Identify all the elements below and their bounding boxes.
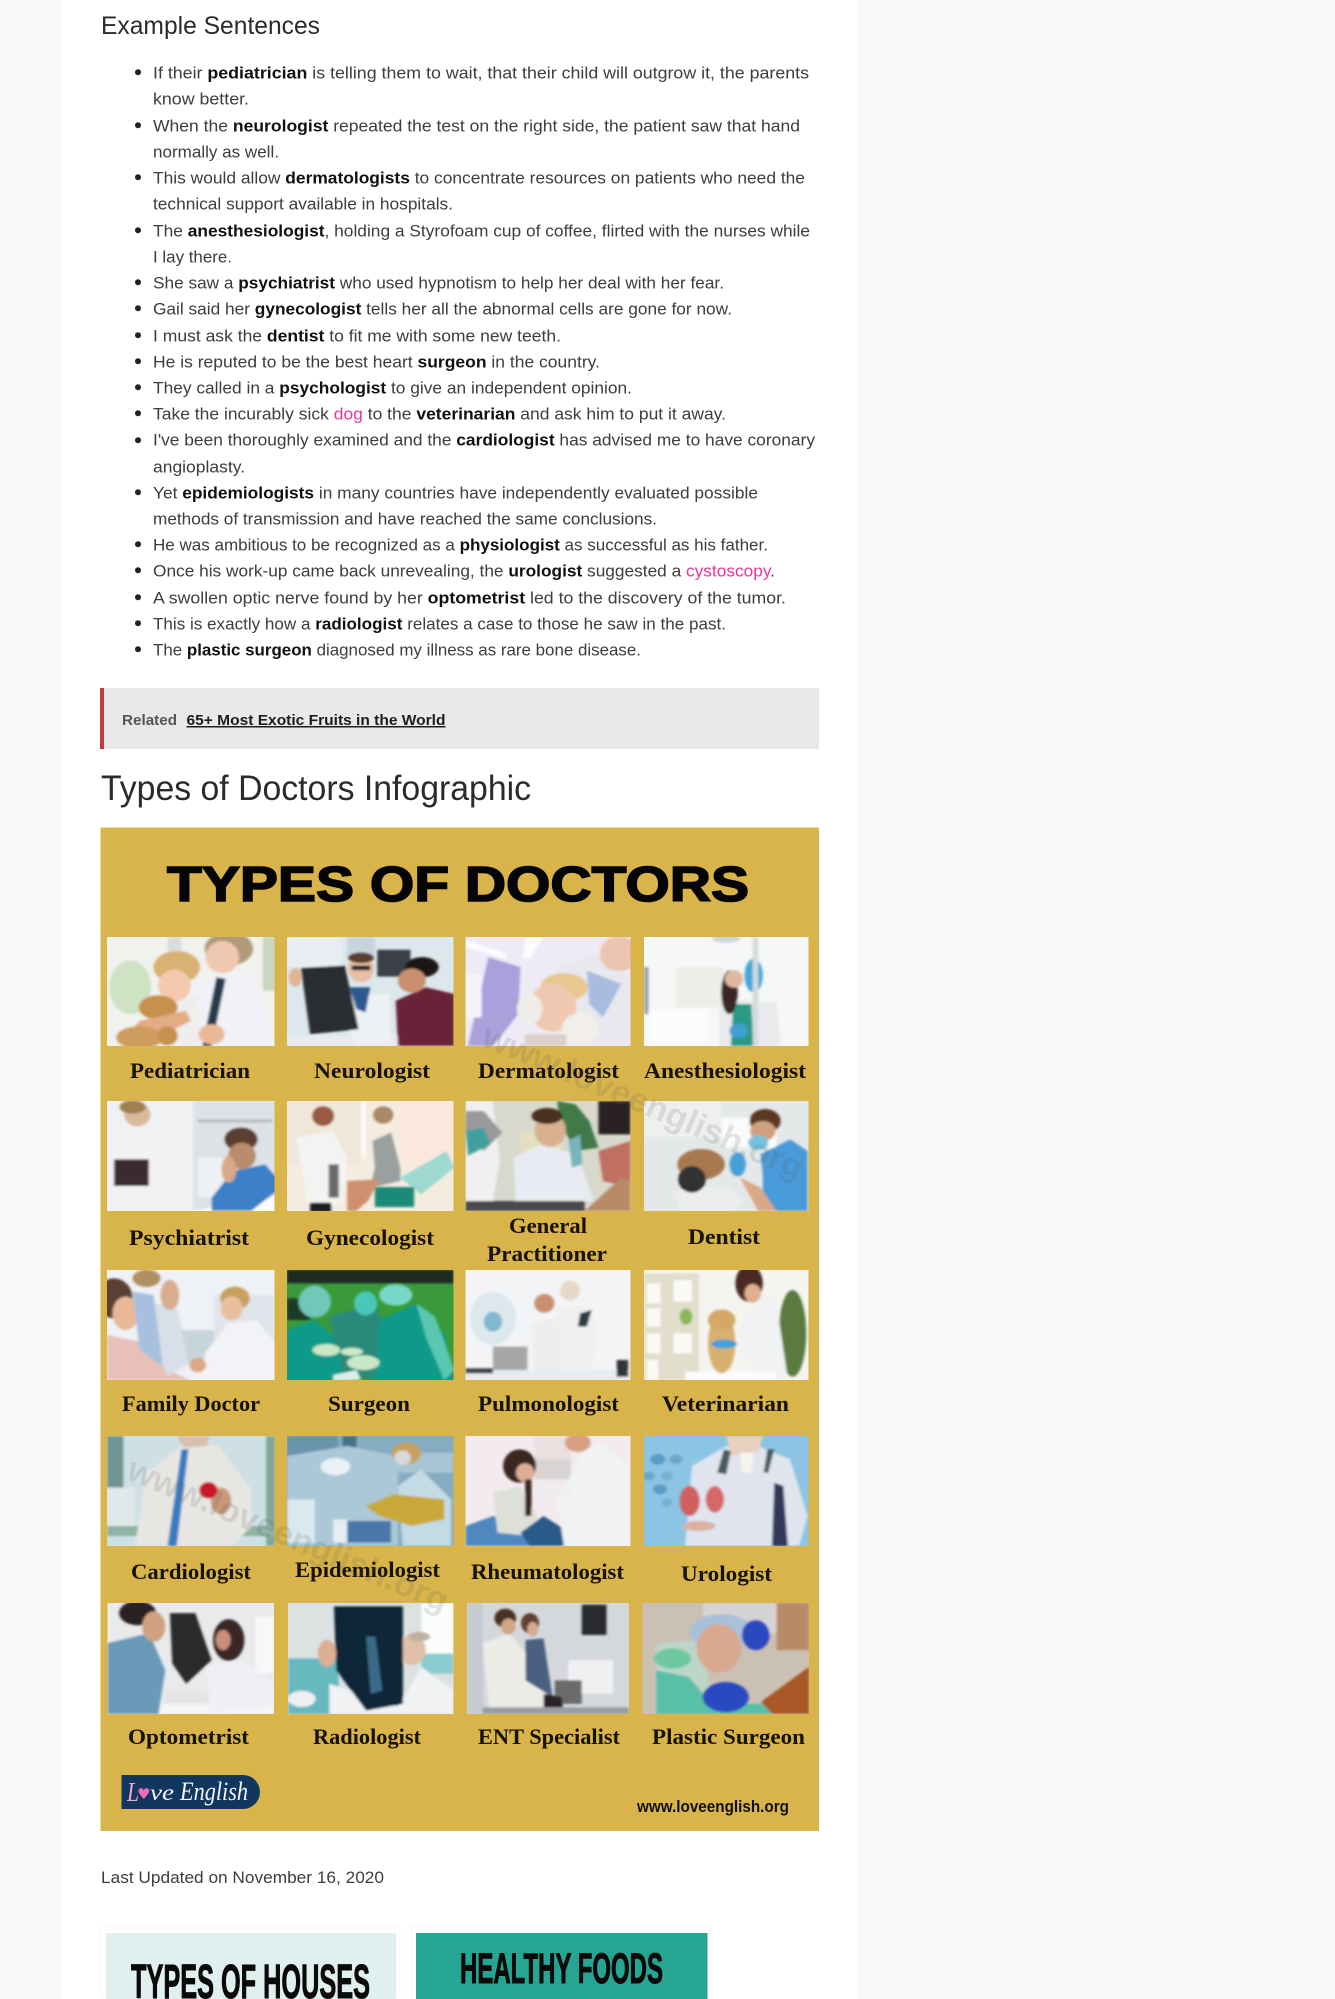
card: Plastic Surgeon xyxy=(642,1603,809,1749)
list: example sentences: A swollen optic nerve found by her optometrist led to the discovery of the tumor. xyxy=(153,589,786,607)
watermark xyxy=(121,1017,809,1620)
list: example sentences: He is reputed to be the best heart surgeon in the country. xyxy=(153,353,600,371)
list: example sentences: methods of transmission and have reached the same conclusions. xyxy=(153,510,657,528)
panel: article column xyxy=(61,0,858,1999)
label: Anesthesiologist xyxy=(644,1058,807,1083)
card: Gynecologist xyxy=(287,1101,454,1250)
label: Surgeon xyxy=(328,1391,410,1416)
card: Psychiatrist xyxy=(107,1100,277,1250)
list: example sentences: Once his work-up came back unrevealing, the urologist suggested a cystoscopy. xyxy=(153,562,775,580)
label: Optometrist xyxy=(128,1724,250,1749)
card: Anesthesiologist xyxy=(644,935,808,1083)
list: example sentences: normally as well. xyxy=(153,143,279,161)
label: Veterinarian xyxy=(662,1391,789,1416)
card: Epidemiologist xyxy=(287,1436,454,1582)
list: example sentences: know better. xyxy=(153,90,249,108)
logo: Love English: English xyxy=(179,1777,248,1806)
list: example sentences: I've been thoroughly examined and the cardiologist has advised me to have coronary xyxy=(153,431,816,449)
label: Epidemiologist xyxy=(295,1557,441,1582)
label: Pediatrician xyxy=(130,1058,250,1083)
list: example sentences: They called in a psychologist to give an independent opinion. xyxy=(153,379,632,397)
list: example sentences xyxy=(135,64,816,659)
list: example sentences: If their pediatrician is telling them to wait, that their child will outgrow it, the parents xyxy=(153,64,809,82)
watermark: www.loveenglish.org xyxy=(476,1017,809,1187)
label: ENT Specialist xyxy=(478,1724,621,1749)
list: example sentences: I must ask the dentist to fit me with some new teeth. xyxy=(153,327,561,345)
label: Cardiologist xyxy=(131,1559,252,1584)
label: Dentist xyxy=(688,1224,761,1249)
card: Pulmonologist xyxy=(466,1270,630,1416)
label: Practitioner xyxy=(487,1241,607,1266)
watermark: www.loveenglish.org xyxy=(121,1450,454,1620)
label xyxy=(487,1213,607,1266)
card: Rheumatologist xyxy=(466,1433,630,1584)
logo: Love English xyxy=(122,1775,260,1809)
label: Family Doctor xyxy=(122,1391,260,1416)
related card: Healthy Foods xyxy=(411,1927,710,1999)
label: Urologist xyxy=(681,1561,773,1586)
card: Family Doctor xyxy=(95,1270,277,1416)
callout: related link: 65+ Most Exotic Fruits in the World xyxy=(186,712,446,729)
infographic title: TYPES OF DOCTORS xyxy=(167,858,749,912)
website url: www.loveenglish.org xyxy=(636,1797,789,1816)
label: General xyxy=(509,1213,587,1238)
card: Veterinarian xyxy=(644,1265,808,1416)
card: Urologist xyxy=(643,1436,808,1586)
label: Psychiatrist xyxy=(129,1225,250,1250)
list: example sentences: The anesthesiologist , holding a Styrofoam cup of coffee, flirted with the nurses while xyxy=(153,222,810,240)
card: ENT Specialist xyxy=(467,1603,629,1749)
list: example sentences: Gail said her gynecologist tells her all the abnormal cells are gone for now. xyxy=(153,300,732,318)
label: Radiologist xyxy=(313,1724,422,1749)
related card: Types of Houses xyxy=(101,1927,400,1999)
list: example sentences: technical support available in hospitals. xyxy=(153,195,453,213)
list: example sentences: This would allow dermatologists to concentrate resources on patients who need the xyxy=(153,169,805,187)
label: Neurologist xyxy=(314,1058,431,1083)
list: example sentences: This is exactly how a radiologist relates a case to those he saw in the past. xyxy=(153,615,726,633)
card: Dermatologist xyxy=(466,936,638,1083)
heading: Example Sentences: Example Sentences xyxy=(101,12,320,40)
label: Pulmonologist xyxy=(478,1391,620,1416)
label: Plastic Surgeon xyxy=(652,1724,805,1749)
card: Dentist xyxy=(644,1101,808,1249)
card: Surgeon xyxy=(287,1270,454,1416)
list: example sentences: angioplasty. xyxy=(153,458,245,476)
callout: related link xyxy=(100,688,819,749)
list: example sentences: She saw a psychiatrist who used hypnotism to help her deal with her fear. xyxy=(153,274,724,292)
card: Optometrist xyxy=(108,1601,274,1749)
logo: Love English: ♥ xyxy=(137,1785,150,1803)
infographic: Types of Doctors xyxy=(95,828,819,1831)
list: example sentences: He was ambitious to be recognized as a physiologist as successful as his father. xyxy=(153,536,768,554)
card: Radiologist xyxy=(288,1603,454,1749)
logo: Love English: ve xyxy=(150,1780,174,1805)
card: Neurologist xyxy=(287,937,454,1083)
last updated note: Last Updated on November 16, 2020 xyxy=(101,1868,384,1887)
heading: Types of Doctors Infographic: Types of Doctors Infographic xyxy=(101,769,531,808)
label: Rheumatologist xyxy=(471,1559,625,1584)
label: Gynecologist xyxy=(306,1225,435,1250)
label: Dermatologist xyxy=(478,1058,620,1083)
list: example sentences: The plastic surgeon diagnosed my illness as rare bone disease. xyxy=(153,641,641,659)
callout: related link: Related xyxy=(122,713,177,729)
list: example sentences: Take the incurably sick dog to the veterinarian and ask him to put it away. xyxy=(153,405,726,423)
related card: Healthy Foods: HEALTHY FOODS xyxy=(460,1945,663,1993)
logo: Love English: L xyxy=(126,1777,139,1807)
list: example sentences: I lay there. xyxy=(153,248,232,266)
list: example sentences: When the neurologist repeated the test on the right side, the patient saw that hand xyxy=(153,117,800,135)
card: Cardiologist xyxy=(107,1436,275,1584)
list: example sentences: Yet epidemiologists in many countries have independently evaluated possible xyxy=(153,484,758,502)
card: Pediatrician xyxy=(107,932,277,1083)
card: General Practitioner xyxy=(466,1101,630,1266)
